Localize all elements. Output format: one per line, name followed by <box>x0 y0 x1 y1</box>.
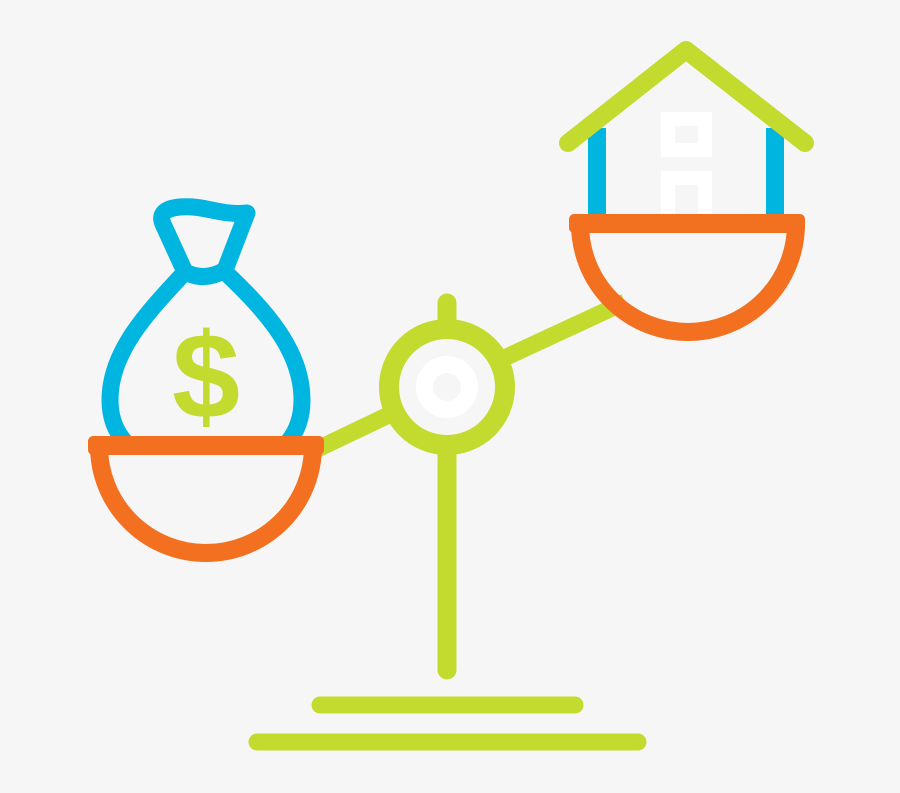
scale pole <box>438 303 456 670</box>
scale base <box>257 705 638 742</box>
icon: dollar sign: $ <box>172 308 240 444</box>
pivot <box>389 329 505 445</box>
beam <box>305 302 625 455</box>
right pan <box>569 214 805 332</box>
icon: house <box>568 50 805 223</box>
left pan <box>88 436 324 553</box>
icon: money bag <box>110 207 302 442</box>
